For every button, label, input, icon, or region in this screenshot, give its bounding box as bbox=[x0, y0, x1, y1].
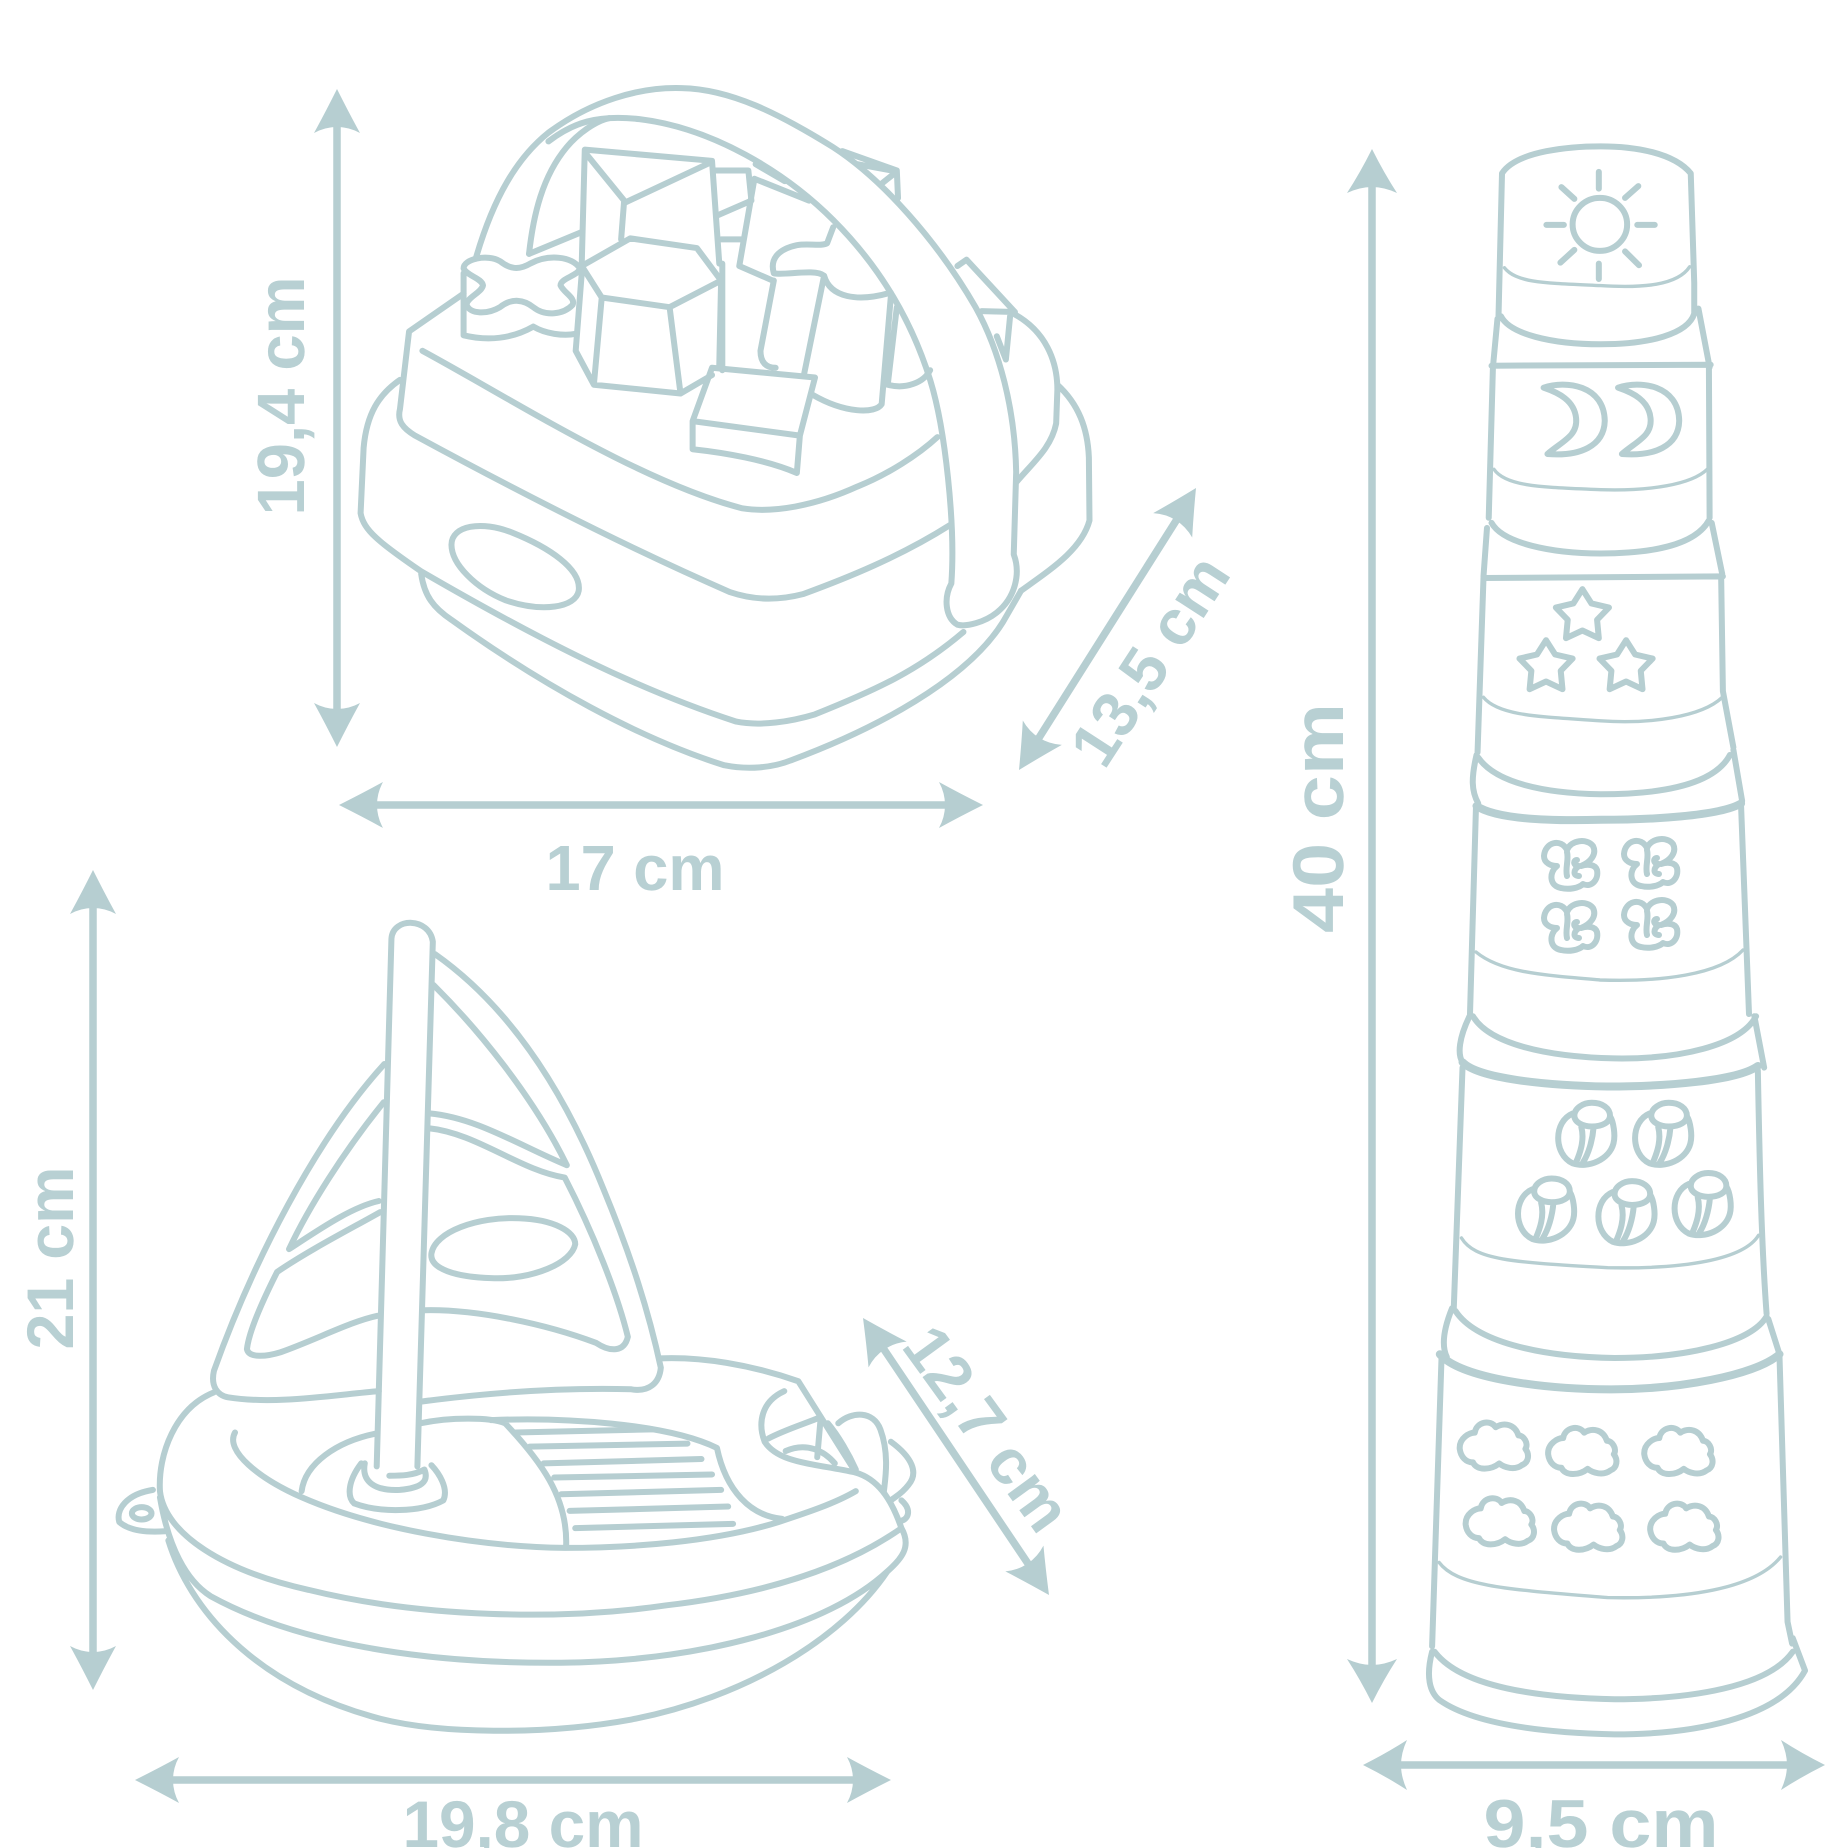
illustration: stacking cups lower section bbox=[1429, 1016, 1805, 1734]
arrow: boat depth bbox=[844, 1305, 1068, 1608]
left sail bbox=[213, 1064, 384, 1400]
pyramid block bbox=[582, 150, 719, 264]
label: stack height: 40 cm bbox=[1279, 703, 1359, 933]
arrow: boat height bbox=[70, 870, 116, 1690]
arrow: stack height bbox=[1347, 149, 1397, 1703]
mooring ring bbox=[119, 1490, 165, 1532]
cup 6 band bbox=[1439, 1557, 1781, 1598]
flower block bbox=[760, 227, 930, 411]
cup 4 body bbox=[1470, 804, 1749, 1014]
illustration: stacking cups upper section bbox=[1473, 146, 1742, 820]
deck stripes bbox=[516, 1429, 733, 1528]
mast bbox=[377, 923, 433, 1466]
cup 4 lower rim bbox=[1460, 1016, 1764, 1068]
arrow: basket width bbox=[339, 782, 983, 828]
basket base bbox=[361, 380, 1021, 768]
cockpit bbox=[233, 1419, 856, 1548]
icon: ladybirds bbox=[1518, 1103, 1731, 1243]
icon: stars bbox=[1519, 589, 1653, 689]
bow fitting bbox=[761, 1391, 913, 1521]
hexagonal block bbox=[576, 238, 721, 393]
cup 4 rim bbox=[1476, 803, 1741, 820]
right sail bbox=[421, 954, 661, 1402]
oval hole bbox=[451, 526, 579, 607]
arrow: basket depth bbox=[999, 476, 1216, 782]
right triangle block bbox=[957, 260, 1015, 360]
basket handle bbox=[476, 88, 1017, 625]
cup 2 band bbox=[1494, 469, 1707, 490]
icon: sun bbox=[1546, 172, 1655, 279]
label: boat depth: 12,7 cm bbox=[889, 1312, 1085, 1545]
bone-shaped block bbox=[464, 258, 580, 338]
cup 1 band bbox=[1504, 267, 1690, 286]
cup 3 outline bbox=[1473, 576, 1742, 803]
illustration: shape sorter basket bbox=[361, 88, 1089, 768]
cup 5 band bbox=[1461, 1235, 1759, 1268]
right side of body bbox=[1015, 314, 1089, 591]
sail oval bbox=[431, 1218, 575, 1278]
basket lid bbox=[399, 294, 950, 599]
cup 5 outline bbox=[1444, 1068, 1780, 1358]
arrow: boat width bbox=[135, 1757, 891, 1803]
cup 3 band bbox=[1483, 697, 1722, 722]
rear right triangle bbox=[842, 151, 898, 198]
rear blocks bbox=[529, 164, 809, 370]
cup 6 top edge bbox=[1440, 1354, 1780, 1389]
mast base bbox=[350, 1463, 445, 1510]
label: basket depth: 13,5 cm bbox=[1056, 542, 1244, 779]
arrow: basket height bbox=[314, 89, 360, 747]
label: boat height: 21 cm bbox=[13, 1166, 87, 1350]
arrow: stack width bbox=[1363, 1740, 1825, 1790]
front block bbox=[693, 368, 815, 473]
cup 1 outline bbox=[1493, 146, 1710, 367]
label: basket height: 19,4 cm bbox=[244, 276, 319, 516]
icon: clouds bbox=[1460, 1423, 1719, 1550]
illustration: sailboat bbox=[119, 923, 913, 1731]
label: basket width: 17 cm bbox=[546, 832, 724, 904]
cup 6 outline bbox=[1429, 1357, 1805, 1734]
icon: moons bbox=[1544, 385, 1679, 454]
hull bbox=[160, 1358, 906, 1731]
cup 5 top edge bbox=[1463, 1062, 1758, 1087]
cup 2 outline bbox=[1483, 365, 1722, 576]
icon: butterflies bbox=[1544, 839, 1677, 951]
